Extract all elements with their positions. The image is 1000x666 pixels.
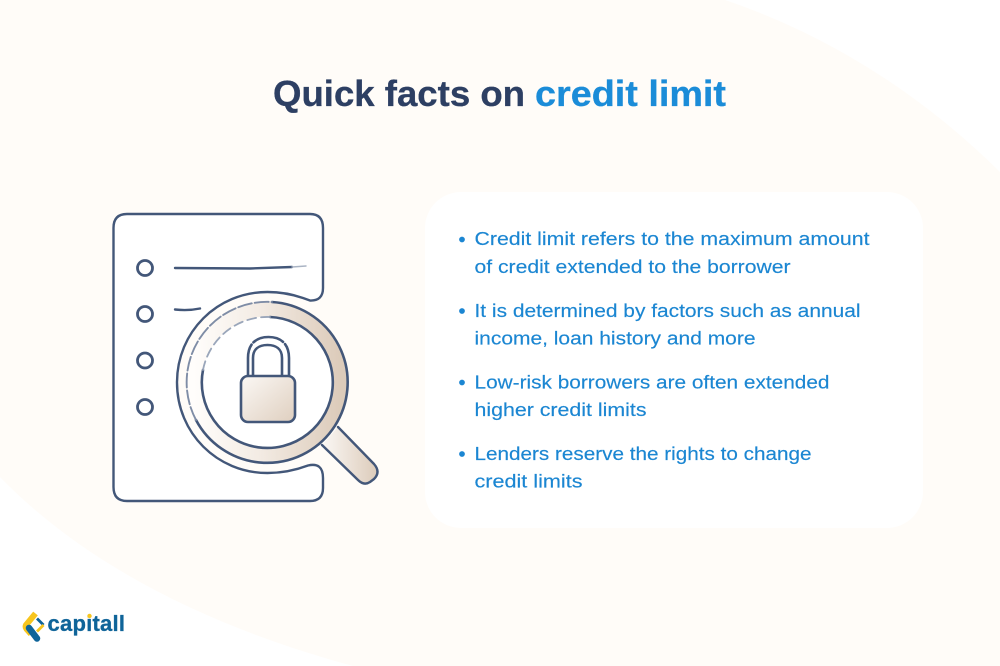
fact 4: Lenders reserve the rights to change bbox=[474, 443, 812, 464]
title bbox=[273, 73, 726, 114]
fact 3: Low-risk borrowers are often extended bbox=[474, 372, 830, 392]
title: credit limit bbox=[535, 73, 726, 114]
fact 3: higher credit limits bbox=[474, 399, 646, 420]
fact 4 bbox=[459, 443, 812, 492]
fact 1: Credit limit refers to the maximum amount bbox=[474, 228, 870, 249]
icon: list bullets bbox=[138, 260, 152, 414]
fact 2: It is determined by factors such as annual bbox=[474, 300, 860, 321]
fact 1: of credit extended to the borrower bbox=[474, 256, 790, 277]
fact 2 bbox=[459, 300, 860, 348]
icon: magnifier lens bbox=[187, 302, 348, 463]
icon: magnifier handle bbox=[322, 427, 378, 484]
logo wordmark: capitall bbox=[48, 611, 125, 636]
icon: document outline bbox=[114, 214, 323, 501]
logo bbox=[26, 611, 125, 638]
icon: list lines bbox=[175, 266, 306, 310]
panel: facts bbox=[425, 192, 923, 528]
title: Quick facts on bbox=[273, 73, 525, 114]
icon: logo mark bbox=[26, 614, 44, 638]
icon: logo dot bbox=[87, 614, 92, 618]
fact 1 bbox=[459, 228, 870, 277]
fact 4: credit limits bbox=[474, 470, 582, 492]
fact 2: income, loan history and more bbox=[474, 328, 756, 348]
fact 3 bbox=[459, 372, 830, 420]
icon: padlock bbox=[241, 337, 295, 422]
illustration: document with magnifier and lock bbox=[114, 214, 378, 501]
